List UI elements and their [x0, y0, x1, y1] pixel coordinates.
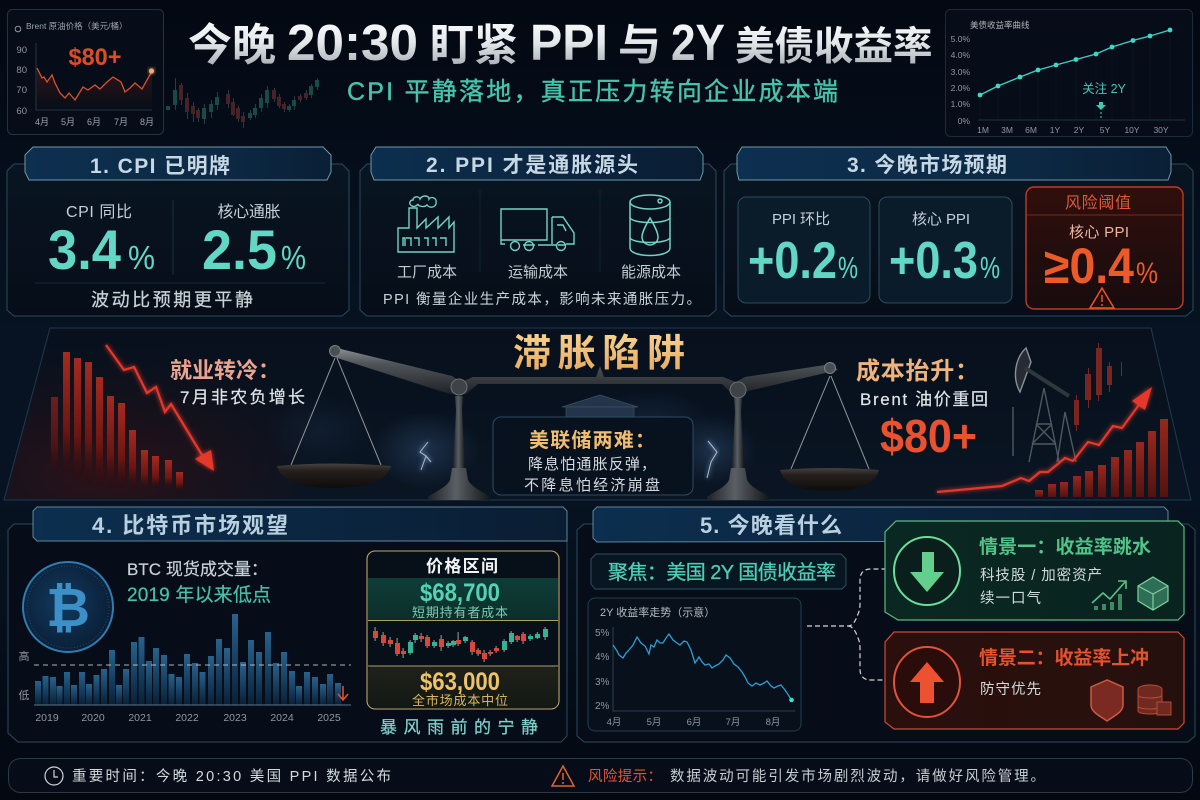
chart: 2Y yield trend: 8月: [766, 717, 780, 728]
oil pump: [1013, 348, 1076, 462]
chart: falling jobs bars: [51, 352, 183, 490]
panel: US Treasury yield curve: 关注 2Y: [1082, 81, 1127, 96]
band: upper price: 短期持有者成本: [412, 605, 508, 620]
chart: BTC volume bars: 2022: [175, 712, 199, 724]
panel: Brent crude price chart: 8月: [140, 117, 154, 127]
title: 盯紧: [430, 21, 518, 70]
heading 1: [25, 147, 331, 180]
panel 2: PPI: PPI 衡量企业生产成本，影响未来通胀压力。: [383, 290, 701, 308]
panel 1: CPI: 2.5: [202, 218, 277, 281]
icon: down arrow: [894, 537, 960, 605]
panel: US Treasury yield curve: [946, 10, 1192, 136]
panel 5: what to watch tonight: [577, 507, 1195, 742]
focus tag: [591, 554, 846, 589]
heading 2: [371, 147, 703, 180]
arrow: rising cost: [937, 387, 1152, 492]
panel 2: PPI: 运输成本: [508, 264, 568, 281]
card: PPI month over month: +0.2: [748, 232, 837, 290]
heading 5: [593, 507, 1168, 542]
panel: Brent crude price chart: 80: [16, 65, 27, 76]
panel: US Treasury yield curve: 1M: [977, 125, 989, 135]
panel: US Treasury yield curve: 5.0%: [951, 34, 970, 44]
illustration: balance scale: [277, 346, 879, 500]
icon: warning: [1090, 288, 1114, 308]
icon: up arrow: [894, 647, 960, 717]
panel 1: CPI: CPI 同比: [66, 203, 132, 221]
panel 4: bitcoin: [8, 507, 567, 742]
chart: BTC volume bars: 2021: [128, 712, 152, 724]
panel: stagflation trap banner: [4, 328, 1191, 500]
chart: 2Y yield trend: 6月: [687, 717, 701, 728]
chart: BTC volume bars: 2024: [270, 712, 294, 724]
card: risk threshold: 核心 PPI: [1069, 224, 1129, 241]
arrow: jobs falling: [106, 345, 214, 471]
card: core PPI: +0.3: [889, 232, 978, 290]
footer bar: 数据波动可能引发市场剧烈波动，请做好风险管理。: [670, 768, 1045, 785]
heading 5: 5. 今晚看什么: [700, 513, 842, 538]
chart: BTC volume bars: 高: [18, 649, 30, 663]
panel: US Treasury yield curve: 10Y: [1124, 125, 1140, 135]
band: upper price: $68,700: [420, 579, 500, 607]
title: 今晚: [188, 21, 276, 70]
panel: US Treasury yield curve: 4.0%: [951, 50, 970, 60]
card: core PPI: [879, 197, 1012, 303]
card: core PPI: %: [980, 250, 1000, 285]
band: lower price: [368, 666, 558, 708]
panel: US Treasury yield curve: 6M: [1025, 125, 1037, 135]
chart: BTC volume bars: 2019: [35, 712, 59, 724]
panel: stagflation trap banner: $80+: [880, 410, 977, 462]
panel: Brent crude price chart: 5月: [61, 117, 75, 127]
chart: 2Y yield trend: 2Y 收益率走势（示意）: [600, 605, 715, 619]
candlestick strip: [373, 627, 548, 662]
icon: warning triangle: [552, 766, 574, 786]
chart: 2Y yield trend: 5%: [595, 628, 610, 639]
decorative candlesticks behind the title: [166, 78, 319, 128]
footer bar: 重要时间：今晚 20:30 美国 PPI 数据公布: [72, 768, 391, 785]
panel: US Treasury yield curve: 美债收益率曲线: [970, 20, 1030, 30]
chart: 2Y yield trend: [588, 598, 801, 731]
Fed dilemma box: [493, 417, 693, 495]
heading 4: 4. 比特币市场观望: [92, 513, 288, 538]
card: risk threshold: %: [1136, 257, 1158, 290]
icon: factory: [398, 196, 454, 252]
band: lower price: $63,000: [420, 668, 500, 696]
panel: Brent crude price chart: 90: [16, 45, 27, 56]
heading 1: 1. CPI 已明牌: [90, 155, 230, 178]
chart: BTC volume bars: 2025: [317, 712, 341, 724]
panel: stagflation trap banner: 成本抬升：: [856, 358, 979, 385]
title: 2Y: [671, 14, 725, 71]
card: scenario one: 情景一：收益率跳水: [979, 536, 1151, 558]
card: scenario two: [885, 632, 1184, 729]
card: PPI month over month: %: [838, 250, 858, 285]
Fed dilemma box: 美联储两难：: [529, 429, 655, 452]
panel: US Treasury yield curve: 3.0%: [951, 67, 970, 77]
panel 4: bitcoin: 2019 年以来低点: [127, 584, 271, 606]
panel: US Treasury yield curve: 1Y: [1050, 125, 1061, 135]
icon: growth chart: [1092, 581, 1126, 610]
icon: clock: [45, 767, 63, 785]
heading 3: [737, 147, 1171, 180]
card: risk threshold: ≥0.4: [1044, 238, 1134, 294]
icon: oil barrel: [630, 195, 670, 256]
panel: US Treasury yield curve: 1.0%: [951, 99, 970, 109]
Fed dilemma box: 不降息怕经济崩盘: [524, 476, 660, 494]
title: PPI: [530, 14, 608, 71]
card: core PPI: 核心 PPI: [912, 211, 970, 228]
card: scenario one: 科技股 / 加密资产: [980, 567, 1102, 584]
panel 2: PPI: 工厂成本: [397, 264, 457, 281]
illustration: Federal Reserve building: [562, 395, 638, 417]
card: risk threshold: 风险阈值: [1065, 194, 1131, 212]
card: scenario two: 情景二：收益率上冲: [979, 647, 1149, 669]
panel: Brent crude price chart: Brent 原油价格（美元/桶）: [26, 21, 128, 31]
chart: rising bars: [1035, 419, 1168, 497]
panel: stagflation trap banner: 7月非农负增长: [180, 388, 305, 407]
card: scenario two: 防守优先: [980, 681, 1041, 698]
panel: Brent crude price chart: 6月: [87, 117, 101, 127]
focus tag: 聚焦：美国 2Y 国债收益率: [608, 561, 836, 584]
subtitle: CPI 平静落地，真正压力转向企业成本端: [347, 78, 838, 106]
title: 美债收益率: [735, 25, 932, 69]
panel: stagflation trap banner: 就业转冷：: [170, 358, 280, 383]
panel: Brent crude price chart: $80+: [68, 44, 122, 71]
storm clouds: [265, 390, 757, 488]
panel 1: CPI: 核心通胀: [218, 203, 280, 221]
panel: Brent crude price chart: [8, 10, 164, 134]
panel 1: CPI: [7, 147, 349, 316]
panel: US Treasury yield curve: 2.0%: [951, 83, 970, 93]
panel: US Treasury yield curve: 5Y: [1100, 125, 1111, 135]
band: upper price: [368, 578, 558, 620]
connector: dashed branches: [807, 569, 886, 680]
chart: BTC volume bars: 2020: [81, 712, 105, 724]
Fed dilemma box: 降息怕通胀反弹，: [528, 456, 656, 473]
panel: stagflation trap banner: Brent 油价重回: [860, 390, 988, 409]
panel 2: PPI: 能源成本: [621, 264, 681, 281]
icon: bitcoin coin: [23, 562, 113, 652]
panel: US Treasury yield curve: 3M: [1001, 125, 1013, 135]
icon: cube: [1138, 577, 1168, 610]
panel: Brent crude price chart: 7月: [114, 117, 128, 127]
chart: 2Y yield trend: 4月: [607, 717, 621, 728]
panel: US Treasury yield curve: 0%: [958, 116, 970, 126]
icon: bitcoin coin: ₿: [46, 578, 90, 638]
panel: Brent crude price chart: 60: [16, 106, 27, 117]
heading 3: 3. 今晚市场预期: [847, 153, 1007, 177]
price range card: 价格区间: [426, 557, 498, 576]
icon: coin stack: [1138, 685, 1171, 715]
panel: Brent crude price chart: 70: [16, 85, 27, 96]
candles: rising oil: [1074, 343, 1122, 431]
panel: US Treasury yield curve: 30Y: [1153, 125, 1169, 135]
chart: 2Y yield trend: 3%: [595, 677, 610, 688]
band: lower price: 全市场成本中位: [412, 693, 508, 708]
card: scenario one: 续一口气: [980, 590, 1041, 607]
panel 1: CPI: %: [281, 239, 306, 276]
panel: Brent crude price chart: 4月: [35, 117, 49, 127]
panel 1: CPI: %: [128, 239, 155, 276]
title: 与: [618, 22, 661, 70]
card: PPI month over month: [738, 197, 870, 303]
chart: BTC volume bars: 低: [18, 689, 30, 702]
chart: 2Y yield trend: 4%: [595, 652, 610, 663]
icon: shield: [1091, 680, 1123, 721]
footer bar: [8, 758, 1192, 792]
icon: truck: [501, 209, 574, 250]
chart: 2Y yield trend: 7月: [726, 717, 740, 728]
card: risk threshold: [1026, 187, 1183, 309]
panel 1: CPI: 波动比预期更平静: [91, 290, 253, 310]
title: 20:30: [287, 14, 418, 71]
heading 2: 2. PPI 才是通胀源头: [426, 154, 638, 177]
price range card: [367, 551, 559, 709]
chart: BTC volume bars: [18, 614, 351, 724]
panel 4: bitcoin: BTC 现货成交量：: [127, 560, 268, 579]
chart: 2Y yield trend: 5月: [647, 717, 661, 728]
panel: stagflation trap banner: 滞胀陷阱: [513, 333, 685, 375]
panel 2: PPI: [360, 147, 716, 316]
panel: US Treasury yield curve: 2Y: [1074, 125, 1085, 135]
panel 3: tonight's expectations: [724, 147, 1193, 316]
panel 1: CPI: 3.4: [48, 218, 121, 281]
card: PPI month over month: PPI 环比: [772, 211, 830, 228]
heading 4: [33, 507, 567, 541]
card: scenario one: [885, 521, 1184, 620]
footer bar: 风险提示：: [588, 768, 662, 785]
chart: 2Y yield trend: 2%: [595, 701, 610, 712]
chart: BTC volume bars: 2023: [223, 712, 247, 724]
panel 4: bitcoin: 暴风雨前的宁静: [380, 718, 538, 737]
